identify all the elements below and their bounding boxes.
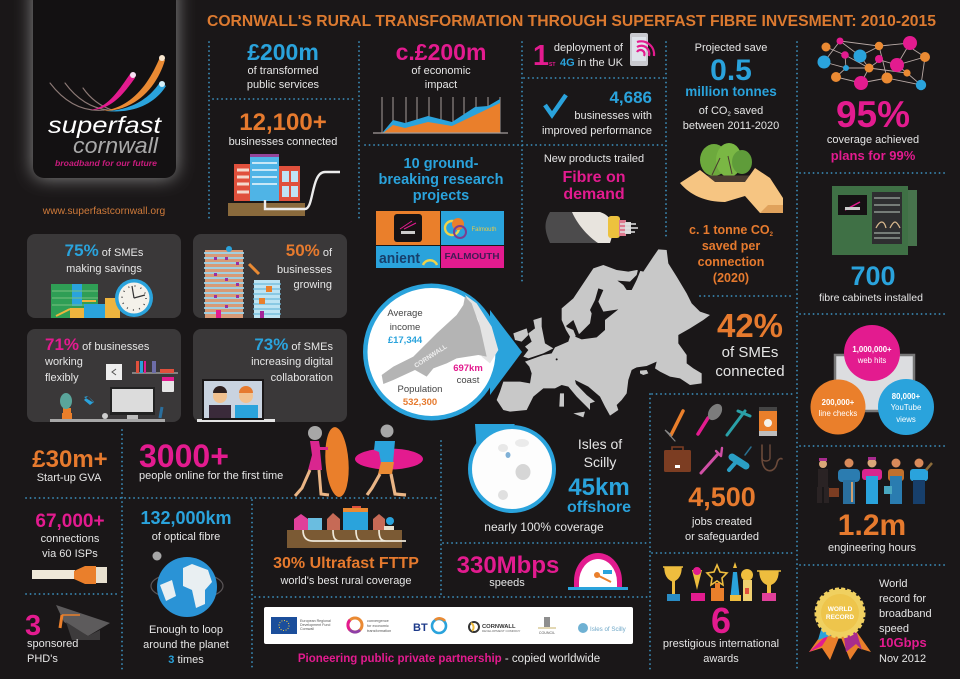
icon: connected building xyxy=(228,154,340,216)
stat: 330Mbps: 330Mbps xyxy=(457,552,559,579)
stat: per-connection: 2 xyxy=(770,232,774,238)
icon: cabinet xyxy=(832,186,917,255)
bubble: YouTube views: 80,000+ xyxy=(892,392,921,401)
stat unit: million tonnes xyxy=(685,84,777,99)
panel: 4G deployment xyxy=(533,33,654,72)
text: 73% of SMEs: 73% of SMEs xyxy=(254,335,333,354)
caption: coast: coast xyxy=(457,375,480,386)
caption: world's best rural coverage xyxy=(279,575,412,587)
caption: prestigious international xyxy=(663,638,779,650)
logo: Cornwall: DEVELOPMENT COMPANY xyxy=(482,629,520,633)
bubble: web hits: web hits xyxy=(857,356,886,365)
logo: Isles of Scilly: Isles of Scilly xyxy=(590,626,627,633)
icon: fibre cable xyxy=(546,212,638,243)
date: Nov 2012 xyxy=(879,653,926,665)
icon: surfers xyxy=(295,424,423,498)
logo: EU xyxy=(271,617,331,634)
stat: coast: 697km xyxy=(453,363,483,374)
caption: increasing digital xyxy=(251,356,333,368)
stat: 95%: 95% xyxy=(836,94,910,135)
caption: of CO xyxy=(699,105,727,117)
bubble: YouTube views xyxy=(878,379,934,435)
stat: 30% FTTP: 30% Ultrafast FTTP xyxy=(273,555,419,572)
website link: www.superfastcornwall.org xyxy=(42,206,166,217)
caption line two: between 2011-2020 xyxy=(683,120,779,132)
caption: making savings xyxy=(66,263,142,275)
logo: council crest xyxy=(538,617,556,635)
partner logos: FALMOUTH xyxy=(444,251,500,261)
caption line two: around the planet xyxy=(143,639,229,651)
partner logos xyxy=(376,211,504,268)
heading line two: Scilly xyxy=(584,454,616,470)
stat: 67,000+: 67,000+ xyxy=(35,511,105,532)
text: 71% of businesses: 71% of businesses xyxy=(45,335,150,354)
icon: check mark xyxy=(545,95,566,115)
stat line four: (2020) xyxy=(713,271,749,285)
logo: convergence: for economic xyxy=(367,624,389,628)
icon: home office desk xyxy=(50,361,178,422)
text: 75% of SMEs: 75% of SMEs xyxy=(65,241,144,260)
panel: people online xyxy=(139,424,423,498)
stat: 4,686: 4,686 xyxy=(609,88,652,107)
icon: medal: WORLD xyxy=(828,606,853,613)
panel: CO2 savings xyxy=(680,42,783,285)
caption: working xyxy=(44,356,83,368)
icon: clock xyxy=(115,279,153,317)
stat: 700: 700 xyxy=(850,261,896,291)
icon: graduation cap xyxy=(56,605,110,640)
caption: businesses connected xyxy=(229,136,337,148)
logo: BT: BT xyxy=(413,622,428,634)
stat: 1st: 1 xyxy=(533,40,549,72)
heading: Fibre on xyxy=(562,169,626,186)
rounded panel: flexible working xyxy=(27,329,181,422)
ordinal suffix: ST xyxy=(549,62,555,68)
stat: 3000+: 3000+ xyxy=(139,438,229,474)
panel: new products xyxy=(544,153,644,243)
panel: PhDs xyxy=(25,605,110,665)
text: 50% of: 50% of xyxy=(286,241,333,260)
caption: deployment of xyxy=(554,42,624,54)
panel: optical fibre xyxy=(140,508,232,666)
bubble: YouTube views: YouTube xyxy=(891,403,921,412)
caption: people online for the first time xyxy=(139,470,283,482)
caption line two: PHD's xyxy=(27,653,58,665)
icon: team of workers xyxy=(817,457,932,504)
rounded panel: savings xyxy=(27,234,181,318)
bubble: line checks: line checks xyxy=(819,409,857,418)
caption: of economic xyxy=(411,65,471,77)
logo: Cornwall: CORNWALL xyxy=(482,624,516,630)
map label: CORNWALL xyxy=(413,343,449,370)
caption: New products trailed xyxy=(544,153,644,165)
caption line two: awards xyxy=(703,653,739,665)
partnership strapline: Pioneering public private partnership - copied worldwide xyxy=(298,653,600,665)
panel: economic impact xyxy=(373,39,508,133)
area chart xyxy=(373,97,508,133)
caption line two: via 60 ISPs xyxy=(42,548,98,560)
stat: 12,100+: 12,100+ xyxy=(239,109,327,136)
text: world record: World xyxy=(879,578,908,590)
logo: BT xyxy=(413,618,446,634)
icon: hand holding trees xyxy=(680,143,783,213)
stat: 10Gbps: 10Gbps xyxy=(879,635,927,650)
icon: globe xyxy=(151,552,223,617)
panel: connections xyxy=(32,511,107,584)
caption: of SMEs xyxy=(722,344,778,361)
stat: income: £17,344 xyxy=(388,335,423,346)
caption: nearly 100% coverage xyxy=(484,520,604,534)
text line two: record for xyxy=(879,593,926,605)
stat: 30m+: £30m+ xyxy=(32,446,108,473)
logo sub-wordmark: cornwall xyxy=(73,133,159,158)
heading line two: demand xyxy=(563,186,625,203)
caption: businesses xyxy=(277,264,332,276)
caption: speeds xyxy=(489,577,525,589)
panel: research projects xyxy=(376,156,504,268)
panel: start-up GVA xyxy=(32,446,108,484)
rounded panel: growing xyxy=(193,234,347,318)
logo: convergence: transformation xyxy=(367,629,391,633)
map inset xyxy=(468,424,556,513)
icon: tower blocks xyxy=(204,246,281,318)
bubble: web hits: 1,000,000+ xyxy=(852,345,892,354)
heading line three: projects xyxy=(413,188,469,204)
panel: public services xyxy=(247,39,320,91)
panel: Isles of Scilly xyxy=(468,424,631,534)
heading: 10 ground- xyxy=(404,156,479,172)
caption: 2 xyxy=(727,112,731,118)
stat line three: connection xyxy=(698,255,764,269)
caption: of transformed xyxy=(248,65,318,77)
panel: improved performance xyxy=(542,88,652,137)
icon: video call laptop xyxy=(197,379,275,422)
stat: 1.2m: 1.2m xyxy=(838,509,906,542)
icon: trophies xyxy=(663,562,781,601)
icon: network cable xyxy=(32,566,107,584)
map: Cornwall outline xyxy=(382,295,498,384)
caption line two: impact xyxy=(425,79,457,91)
caption: saved xyxy=(731,105,763,117)
caption: sponsored xyxy=(27,638,78,650)
logo: convergence: convergence xyxy=(367,619,389,623)
caption: population: Population xyxy=(398,384,442,395)
caption: Enough to loop xyxy=(149,624,223,636)
stat: 0.5: 0.5 xyxy=(710,54,752,87)
logo: Isles of Scilly xyxy=(578,623,627,633)
text line four: speed xyxy=(879,623,909,635)
panel: awards xyxy=(663,562,781,665)
title: CORNWALL'S RURAL TRANSFORMATION THROUGH SUPERFAST FIBRE INVESMENT: 2010-2015 xyxy=(207,13,936,30)
icon: medal xyxy=(809,589,871,660)
caption: of optical fibre xyxy=(152,531,220,543)
bubble: web hits xyxy=(844,325,900,381)
stat: 45km: 45km xyxy=(568,474,630,501)
caption line two: flexibly xyxy=(45,372,79,384)
map: Europe xyxy=(497,249,710,417)
stat: 200m: £200m xyxy=(247,39,319,65)
icon: village with fibre xyxy=(287,506,406,548)
stat: per-connection: c. 1 tonne CO xyxy=(689,223,770,237)
caption: connections xyxy=(41,533,100,545)
icon: medal: RECORD xyxy=(826,614,854,621)
stat: 3: 3 xyxy=(25,610,41,642)
logo strapline: broadband for our future xyxy=(55,159,158,168)
icon: job tools xyxy=(664,401,782,473)
logo: council crest: COUNCIL xyxy=(539,631,555,635)
panel: speeds xyxy=(457,552,628,590)
icon: speedometer xyxy=(568,553,628,590)
caption line two: improved performance xyxy=(542,125,652,137)
text: income line two: income xyxy=(390,322,420,333)
panel: businesses connected xyxy=(228,109,340,216)
caption line two: or safeguarded xyxy=(685,531,759,543)
caption: fibre cabinets installed xyxy=(819,292,923,304)
caption: Start-up GVA xyxy=(37,472,102,484)
heading: Isles of xyxy=(578,436,622,452)
partner logos: anient xyxy=(379,251,420,267)
partner logos: Falmouth xyxy=(471,227,497,233)
panel: online reach xyxy=(810,325,934,435)
caption: Projected save xyxy=(695,42,767,54)
stat: c.200m: c.£200m xyxy=(396,39,486,65)
caption line two: public services xyxy=(247,79,320,91)
logo wordmark: superfast xyxy=(48,112,163,138)
stat: population: 532,300 xyxy=(403,397,437,408)
logo: Cornwall xyxy=(469,622,520,633)
icon: money stack xyxy=(51,284,120,318)
number: 42% xyxy=(717,307,783,344)
bubble: YouTube views: views xyxy=(896,415,916,424)
icon: phone with signal xyxy=(630,33,654,66)
stat: 4,500: 4,500 xyxy=(688,482,756,512)
panel: Cornwall map callout xyxy=(363,284,522,420)
logo: EU: European Regional xyxy=(300,619,331,623)
bubble: line checks: 200,000+ xyxy=(822,398,855,407)
icon: network xyxy=(818,36,930,90)
caption line three: 3 times xyxy=(168,654,204,666)
panel: world record xyxy=(809,578,932,665)
panel: fibre cabinets xyxy=(819,186,923,304)
callout: plans for 99% xyxy=(831,148,916,163)
caption line two: 4G in the UK xyxy=(560,57,624,69)
panel: engineering hours xyxy=(817,457,932,554)
caption line two: growing xyxy=(293,279,332,291)
logo: EU: Cornwall xyxy=(300,627,314,631)
stat: 132,000km: 132,000km xyxy=(140,508,232,528)
panel: logo xyxy=(33,0,176,178)
icon: monitor xyxy=(835,355,914,411)
stat line two: saved per xyxy=(702,239,760,253)
icon: fibre light trails xyxy=(50,55,166,111)
rounded panel: digital collaboration xyxy=(193,329,347,422)
caption line two: connected xyxy=(715,363,785,380)
heading line two: breaking research xyxy=(379,172,503,188)
bubble: line checks xyxy=(810,380,866,434)
caption: engineering hours xyxy=(828,542,917,554)
stat: 6: 6 xyxy=(711,600,731,641)
caption: coverage achieved xyxy=(827,134,919,146)
logo: convergence xyxy=(348,618,391,633)
caption: businesses with xyxy=(574,110,652,122)
caption line two: collaboration xyxy=(271,372,333,384)
logo: EU: Development Fund xyxy=(300,623,330,627)
stat: 42% SMEs xyxy=(715,307,785,380)
panel: coverage xyxy=(818,36,930,163)
stat unit: offshore xyxy=(567,499,631,516)
text line three: broadband xyxy=(879,608,932,620)
panel: jobs xyxy=(664,401,782,543)
panel: ultrafast FTTP xyxy=(273,506,419,587)
text: average income: Average xyxy=(387,308,423,319)
caption: jobs created xyxy=(691,516,752,528)
panel: partner logos xyxy=(264,607,633,644)
